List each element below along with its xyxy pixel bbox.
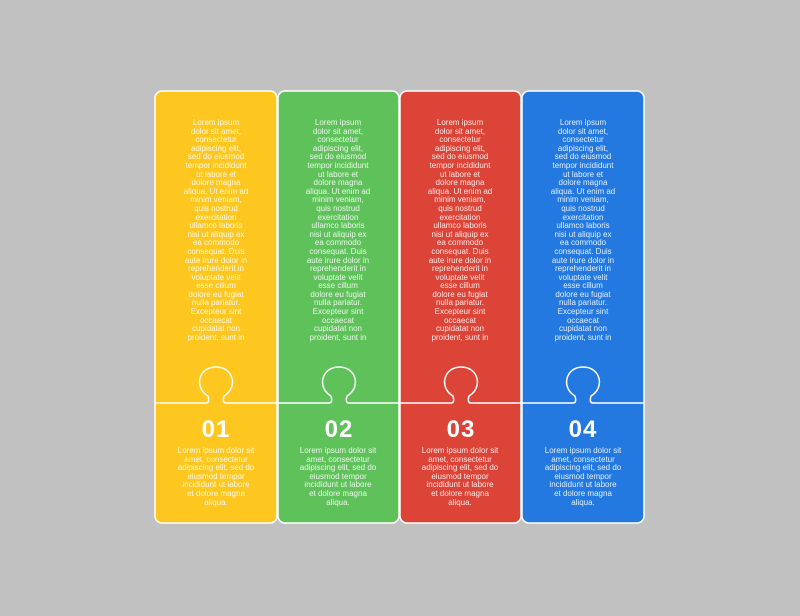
text: column 3 bottom: eiusmod tempor bbox=[431, 472, 489, 481]
text: column 4 top: nulla pariatur. bbox=[559, 298, 607, 307]
number 03: 03 bbox=[447, 416, 475, 443]
text: column 4 top: cupidatat non bbox=[559, 324, 607, 333]
number 02: 02 bbox=[325, 416, 353, 443]
text: column 3 top: reprehenderit in bbox=[432, 264, 488, 273]
text: column 2 bottom: adipiscing elit, sed do bbox=[300, 463, 376, 472]
text: column 3 top: tempor incididunt bbox=[430, 161, 490, 170]
text: column 4 top: occaecat bbox=[567, 316, 599, 325]
text: column 4 top bbox=[551, 118, 615, 342]
text: column 4 top: reprehenderit in bbox=[555, 264, 611, 273]
text: column 1 top: dolore magna bbox=[192, 178, 240, 187]
text: column 2 top: Lorem ipsum bbox=[315, 118, 361, 127]
text: column 1 top: ea commodo bbox=[193, 238, 239, 247]
text: column 1 top: voluptate velit bbox=[192, 273, 240, 282]
text: column 1 top: proident, sunt in bbox=[188, 333, 244, 342]
column 2 green bbox=[278, 91, 399, 523]
text: column 2 top: adipiscing elit, bbox=[313, 144, 363, 153]
text: column 1 top: exercitation bbox=[196, 213, 236, 222]
text: column 2 bottom bbox=[300, 446, 376, 507]
text: column 3 top: occaecat bbox=[444, 316, 476, 325]
text: column 2 top: proident, sunt in bbox=[310, 333, 366, 342]
text: column 2 top: nulla pariatur. bbox=[314, 298, 362, 307]
text: column 2 top: cupidatat non bbox=[314, 324, 362, 333]
text: column 3 top: esse cillum bbox=[440, 281, 480, 290]
text: column 3 top: aute irure dolor in bbox=[429, 256, 491, 264]
text: column 4 bottom: amet, consectetur bbox=[551, 455, 615, 464]
text: column 1 top: dolore eu fugiat bbox=[188, 290, 244, 299]
text: column 1 bottom: et dolore magna bbox=[187, 489, 245, 498]
text: column 3 top: aliqua. Ut enim ad bbox=[428, 187, 492, 196]
text: column 1 top: ullamco laboris bbox=[189, 221, 243, 230]
text: column 3 top: quis nostrud bbox=[438, 204, 482, 213]
text: column 4 top: tempor incididunt bbox=[553, 161, 613, 170]
puzzle divider with knobs bbox=[155, 367, 644, 403]
text: column 2 top: occaecat bbox=[322, 316, 354, 325]
text: column 3 top: cupidatat non bbox=[436, 324, 484, 333]
text: column 4 bottom: et dolore magna bbox=[554, 489, 612, 498]
text: column 4 top: consequat. Duis bbox=[554, 247, 612, 256]
text: column 1 top: occaecat bbox=[200, 316, 232, 325]
text: column 2 top: sed do eiusmod bbox=[310, 152, 366, 161]
text: column 3 top: Excepteur sint bbox=[435, 307, 485, 316]
text: column 4 bottom: aliqua. bbox=[571, 498, 595, 507]
text: column 3 top: exercitation bbox=[440, 213, 480, 222]
text: column 1 top: consequat. Duis bbox=[187, 247, 245, 256]
text: column 2 top: quis nostrud bbox=[316, 204, 360, 213]
text: column 4 top: sed do eiusmod bbox=[555, 152, 611, 161]
text: column 4 bottom bbox=[545, 446, 622, 507]
text: column 3 top bbox=[428, 118, 492, 342]
text: column 2 bottom: aliqua. bbox=[326, 498, 350, 507]
text: column 1 top: minim veniam, bbox=[190, 195, 242, 204]
text: column 4 bottom: adipiscing elit, sed do bbox=[545, 463, 621, 472]
text: column 3 top: nulla pariatur. bbox=[436, 298, 484, 307]
text: column 3 bottom: et dolore magna bbox=[431, 489, 489, 498]
text: column 2 top: minim veniam, bbox=[312, 195, 364, 204]
text: column 1 top: nulla pariatur. bbox=[192, 298, 240, 307]
text: column 3 top: dolor sit amet, bbox=[435, 127, 485, 136]
column 3 red bbox=[400, 91, 521, 523]
text: column 3 top: proident, sunt in bbox=[432, 333, 488, 342]
text: column 4 bottom: incididunt ut labore bbox=[549, 480, 617, 489]
text: column 1 bottom: eiusmod tempor bbox=[187, 472, 245, 481]
text: column 2 top: aliqua. Ut enim ad bbox=[306, 187, 370, 196]
text: column 2 bottom: Lorem ipsum dolor sit bbox=[300, 446, 376, 455]
text: column 4 top: dolore magna bbox=[559, 178, 607, 187]
text: column 1 bottom: Lorem ipsum dolor sit bbox=[178, 446, 254, 455]
number 04: 04 bbox=[569, 416, 597, 443]
text: column 4 top: nisi ut aliquip ex bbox=[555, 230, 611, 239]
text: column 1 top: esse cillum bbox=[196, 281, 236, 290]
text: column 3 top: voluptate velit bbox=[436, 273, 484, 282]
text: column 1 bottom: aliqua. bbox=[204, 498, 228, 507]
text: column 1 top: aliqua. Ut enim ad bbox=[184, 187, 248, 196]
column 1 yellow bbox=[155, 91, 277, 523]
text: column 4 top: esse cillum bbox=[563, 281, 603, 290]
text: column 3 bottom: adipiscing elit, sed do bbox=[422, 463, 498, 472]
text: column 4 top: ea commodo bbox=[560, 238, 606, 247]
text: column 4 bottom: Lorem ipsum dolor sit bbox=[545, 446, 621, 455]
text: column 4 top: aute irure dolor in bbox=[552, 256, 614, 264]
text: column 3 top: ea commodo bbox=[437, 238, 483, 247]
text: column 4 top: Lorem ipsum bbox=[560, 118, 606, 127]
text: column 2 bottom: incididunt ut labore bbox=[304, 480, 372, 489]
text: column 3 bottom bbox=[422, 446, 498, 507]
text: column 1 top: aute irure dolor in bbox=[185, 256, 247, 264]
text: column 2 top: tempor incididunt bbox=[308, 161, 368, 170]
text: column 1 top: ut labore et bbox=[196, 170, 236, 179]
text: column 4 top: ut labore et bbox=[563, 170, 603, 179]
text: column 1 top: nisi ut aliquip ex bbox=[188, 230, 244, 239]
text: column 1 top: cupidatat non bbox=[192, 324, 240, 333]
text: column 1 top: dolor sit amet, bbox=[191, 127, 241, 136]
text: column 2 top: consequat. Duis bbox=[309, 247, 367, 256]
text: column 3 bottom: incididunt ut labore bbox=[426, 480, 494, 489]
text: column 2 top: dolor sit amet, bbox=[313, 127, 363, 136]
text: column 2 top: ut labore et bbox=[318, 170, 358, 179]
column 4 blue bbox=[522, 91, 644, 523]
text: column 4 top: minim veniam, bbox=[557, 195, 609, 204]
text: column 2 top: nisi ut aliquip ex bbox=[310, 230, 366, 239]
text: column 1 top: sed do eiusmod bbox=[188, 152, 244, 161]
text: column 3 top: consectetur bbox=[439, 135, 481, 144]
text: column 1 top: quis nostrud bbox=[194, 204, 238, 213]
text: column 1 top: Lorem ipsum bbox=[193, 118, 239, 127]
text: column 4 top: exercitation bbox=[563, 213, 603, 222]
text: column 1 bottom bbox=[178, 446, 254, 507]
text: column 3 top: ut labore et bbox=[440, 170, 480, 179]
text: column 4 top: aliqua. Ut enim ad bbox=[551, 187, 615, 196]
text: column 4 top: proident, sunt in bbox=[555, 333, 611, 342]
text: column 2 top: esse cillum bbox=[318, 281, 358, 290]
text: column 4 top: Excepteur sint bbox=[558, 307, 608, 316]
text: column 3 bottom: amet, consectetur bbox=[428, 455, 492, 464]
text: column 2 top: ullamco laboris bbox=[311, 221, 365, 230]
text: column 3 bottom: Lorem ipsum dolor sit bbox=[422, 446, 498, 455]
text: column 2 top: reprehenderit in bbox=[310, 264, 366, 273]
text: column 4 top: voluptate velit bbox=[559, 273, 607, 282]
text: column 2 top: aute irure dolor in bbox=[307, 256, 369, 264]
text: column 1 top bbox=[184, 118, 248, 342]
text: column 1 bottom: adipiscing elit, sed do bbox=[178, 463, 254, 472]
text: column 2 top: Excepteur sint bbox=[313, 307, 363, 316]
text: column 2 top: dolore magna bbox=[314, 178, 362, 187]
text: column 1 bottom: incididunt ut labore bbox=[182, 480, 250, 489]
text: column 4 top: consectetur bbox=[562, 135, 604, 144]
text: column 2 bottom: eiusmod tempor bbox=[309, 472, 367, 481]
text: column 3 top: minim veniam, bbox=[434, 195, 486, 204]
text: column 1 top: Excepteur sint bbox=[191, 307, 241, 316]
text: column 1 top: adipiscing elit, bbox=[191, 144, 241, 153]
text: column 4 top: adipiscing elit, bbox=[558, 144, 608, 153]
text: column 3 top: dolore magna bbox=[436, 178, 484, 187]
text: column 4 top: dolor sit amet, bbox=[558, 127, 608, 136]
text: column 3 top: Lorem ipsum bbox=[437, 118, 483, 127]
text: column 3 top: consequat. Duis bbox=[431, 247, 489, 256]
text: column 1 top: tempor incididunt bbox=[186, 161, 246, 170]
text: column 3 bottom: aliqua. bbox=[448, 498, 472, 507]
text: column 4 top: quis nostrud bbox=[561, 204, 605, 213]
text: column 3 top: dolore eu fugiat bbox=[432, 290, 488, 299]
text: column 3 top: ullamco laboris bbox=[433, 221, 487, 230]
text: column 3 top: nisi ut aliquip ex bbox=[432, 230, 488, 239]
text: column 2 top: ea commodo bbox=[315, 238, 361, 247]
number 01: 01 bbox=[202, 416, 230, 443]
text: column 2 top: exercitation bbox=[318, 213, 358, 222]
text: column 3 top: sed do eiusmod bbox=[432, 152, 488, 161]
text: column 2 top: voluptate velit bbox=[314, 273, 362, 282]
text: column 2 bottom: et dolore magna bbox=[309, 489, 367, 498]
text: column 4 top: dolore eu fugiat bbox=[555, 290, 611, 299]
text: column 2 top: dolore eu fugiat bbox=[310, 290, 366, 299]
text: column 1 top: consectetur bbox=[195, 135, 237, 144]
text: column 4 bottom: eiusmod tempor bbox=[554, 472, 612, 481]
text: column 1 top: reprehenderit in bbox=[188, 264, 244, 273]
text: column 2 top: consectetur bbox=[317, 135, 359, 144]
text: column 1 bottom: amet, consectetur bbox=[184, 455, 248, 464]
text: column 2 top bbox=[306, 118, 370, 342]
text: column 4 top: ullamco laboris bbox=[556, 221, 610, 230]
text: column 3 top: adipiscing elit, bbox=[435, 144, 485, 153]
text: column 2 bottom: amet, consectetur bbox=[306, 455, 370, 464]
